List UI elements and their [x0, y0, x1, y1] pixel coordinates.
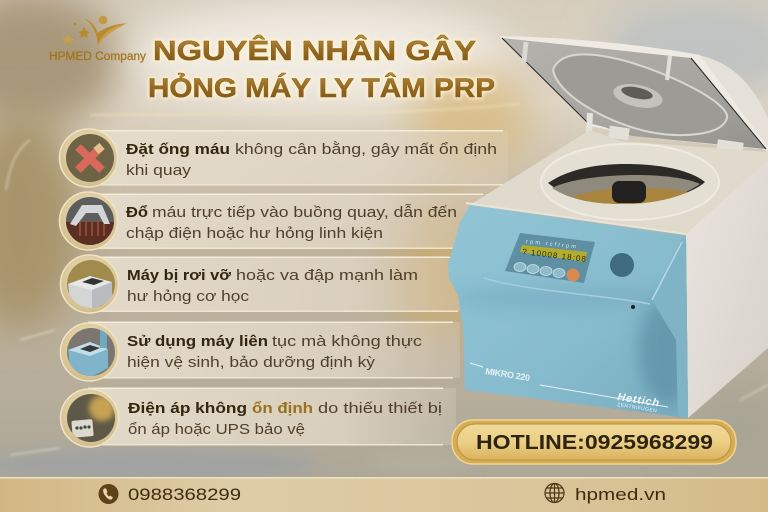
panel: cause 4: Sử dụng máy liên	[127, 333, 268, 350]
panel: cause 3: hư hỏng cơ học	[127, 288, 250, 305]
panel: cause 5: do thiếu thiết bị	[318, 400, 442, 417]
title: HỎNG MÁY LY TÂM PRP	[148, 71, 495, 103]
panel: cause 5: ổn định	[252, 400, 313, 417]
icon: globe	[545, 484, 564, 502]
panel: cause 2: máu trực tiếp vào buồng quay, dẫn đến	[152, 204, 457, 221]
logo: HPMED Company	[49, 16, 146, 63]
phone number: 0988368299	[128, 485, 241, 504]
panel: cause 1: không cân bằng, gây mất ổn định	[235, 141, 497, 158]
icon: spark and socket	[71, 395, 115, 438]
top deck	[470, 130, 768, 234]
icon: phone	[98, 484, 118, 504]
lid disc	[553, 54, 727, 135]
title: HỎNG MÁY LY TÂM PRP	[148, 71, 495, 103]
panel: cause 3: hoặc va đập mạnh làm	[236, 267, 418, 284]
knob	[610, 253, 634, 277]
panel: cause 4: tục mà không thực	[272, 333, 423, 350]
centrifuge machine: ZENTRIFUGEN	[617, 402, 658, 414]
panel: cause 3	[60, 255, 463, 313]
logo: HPMED Company: HPMED Company	[49, 51, 146, 63]
panel: cause 5: ổn áp hoặc UPS bảo vệ	[128, 421, 305, 438]
icon: red cross	[78, 146, 102, 170]
panel: cause 1: Đặt ống máu	[126, 141, 230, 158]
lid latches	[524, 42, 526, 62]
website: hpmed.vn	[575, 485, 666, 504]
centrifuge machine: MIKRO 220	[485, 366, 531, 383]
lid back shell	[692, 54, 768, 152]
chamber	[541, 144, 719, 220]
blue front	[448, 205, 688, 418]
panel: cause 5	[60, 388, 456, 447]
footer bar	[0, 477, 768, 512]
panel: cause 5: Điện áp không	[128, 400, 247, 417]
right side	[686, 150, 768, 418]
panel: cause 4	[60, 322, 460, 381]
centrifuge machine: rpm rcf/rpm	[526, 239, 577, 250]
panel: cause 2: chập điện hoặc hư hỏng linh kiện	[126, 225, 383, 242]
icon: circuit part	[66, 205, 114, 246]
lid inner plate	[502, 38, 766, 149]
centrifuge machine: Hettich	[617, 391, 660, 410]
panel: cause 2	[60, 192, 488, 250]
hotline button	[452, 420, 736, 464]
title: NGUYÊN NHÂN GÂY	[153, 35, 476, 66]
hotline button: HOTLINE:0925968299	[476, 432, 713, 454]
panel: cause 3: Máy bị rơi vỡ	[127, 267, 231, 284]
icon: blue machine	[68, 330, 108, 378]
centrifuge machine	[440, 36, 768, 425]
panel: cause 4: hiện vệ sinh, bảo dưỡng định kỳ	[127, 354, 376, 371]
title: NGUYÊN NHÂN GÂY	[153, 35, 476, 66]
panel: cause 1	[60, 129, 508, 187]
title	[148, 35, 495, 103]
panel: cause 2: Đổ	[126, 204, 148, 221]
panel: cause 1: khi quay	[126, 162, 192, 179]
control panel	[505, 233, 595, 283]
icon: damaged machine	[68, 276, 112, 310]
brand labels	[470, 363, 483, 367]
centrifuge machine: ? 10008 18:08	[522, 247, 587, 264]
